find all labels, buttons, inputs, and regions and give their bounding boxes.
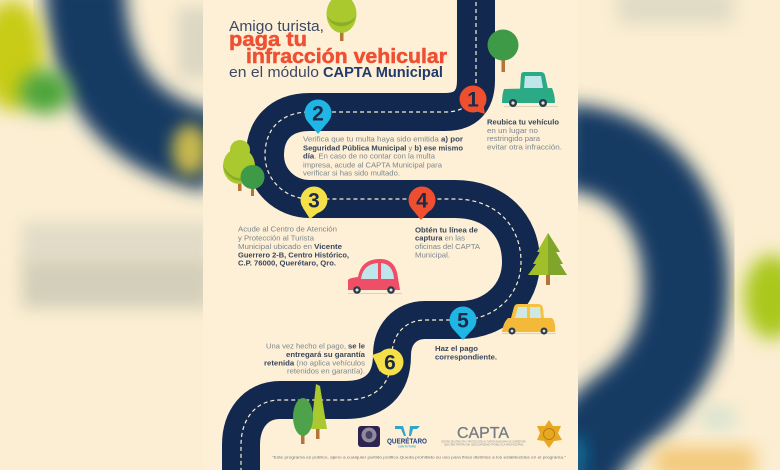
step 5 text: correspondiente. [435,352,497,362]
step 1 text: en un lugar no [487,126,538,135]
title: paga tu [229,29,307,51]
step 5 text [435,344,497,362]
marker 4: 4 [416,190,428,212]
title: Amigo turista, [229,18,324,35]
step 3 text [238,224,349,268]
step 2 text: Verifica que tu multa haya sido emitida a) por [303,134,463,144]
logo: municipal shield [358,426,380,447]
marker 3: 3 [308,190,320,212]
step 2 text: día. En caso de no contar con la multa [303,152,436,160]
marker 2: 2 [312,102,324,126]
marker 5 [450,306,476,340]
step 1 text [487,118,562,152]
step 1 text: restringido para [487,134,541,143]
trees: left pair [223,140,264,196]
logo: Querétaro: QUERÉTARO [387,436,427,446]
step 2 text [303,134,463,178]
tree: pine right [528,233,567,285]
step 6 text [264,342,366,376]
marker 1 [460,86,486,114]
marker 6: 6 [384,352,396,374]
marker 1: 1 [467,88,479,112]
logo: Querétaro [387,426,427,448]
logo: Querétaro: CON FUTURO [398,444,417,448]
tree: top lime [326,0,356,41]
trees: bottom pair [293,384,327,444]
step 4 text [415,226,480,260]
step 2 text: Seguridad Pública Municipal y b) ese mismo [303,144,463,152]
step 3 text: y Protección al Turista [238,234,315,242]
logo: CAPTA: SECRETARÍA DE SEGURIDAD PÚBLICA MUNICIPAL [444,444,525,446]
logo: CAPTA [441,425,526,446]
step 3 text: C.P. 76000, Querétaro, Qro. [238,258,336,268]
step 6 text: retenida (no aplica vehículos [264,358,365,368]
marker 2 [304,100,332,134]
step 2 text: verificar si has sido multado. [303,168,400,178]
step 6 text: retenidos en garantía). [287,366,365,376]
car: yellow taxi [502,304,556,334]
step 4 text: Obtén tu línea de [415,226,478,234]
logo: CAPTA: CENTRO DE ATENCIÓN Y PROTECCIÓN AL TURISTA MUNICIPAL DE QUERÉTARO [441,440,526,444]
footnote: "Este programa es público, ajeno a cualquier partido político.Queda prohibido su uso para fines distintos a los establecidos en el programa." [272,454,567,460]
tree: top green [488,30,518,72]
step 3 text: Municipal ubicado en Vicente [238,242,342,251]
step 5 text: Haz el pago [435,344,478,353]
title: CAPTA Municipal [323,65,443,81]
marker 6 [372,348,404,376]
step 4 text: oficinas del CAPTA [415,242,480,251]
title: infracción vehicular [246,46,447,68]
marker 5: 5 [457,310,469,332]
poster panel [203,0,578,470]
step 4 text: Municipal. [415,250,450,260]
step 1 text: Reubica tu vehículo [487,118,559,126]
logo: CAPTA: CAPTA [457,425,510,442]
title [229,18,447,81]
step 1 text: evitar otra infracción. [487,142,562,152]
step 6 text: entregará su garantía [286,350,366,359]
marker 4 [408,186,436,220]
car: red [348,259,402,294]
car: green [502,72,558,107]
step 3 text: Acude al Centro de Atención [238,224,337,234]
step 2 text: impresa, acude al CAPTA Municipal para [303,160,443,170]
winding road [241,0,521,470]
logo: star badge [537,420,562,448]
title: en el módulo [229,65,319,81]
step 3 text: Guerrero 2-B, Centro Histórico, [238,250,349,260]
marker 3 [300,186,328,219]
step 4 text: captura en las [415,234,465,242]
step 6 text: Una vez hecho el pago, se le [266,342,365,350]
